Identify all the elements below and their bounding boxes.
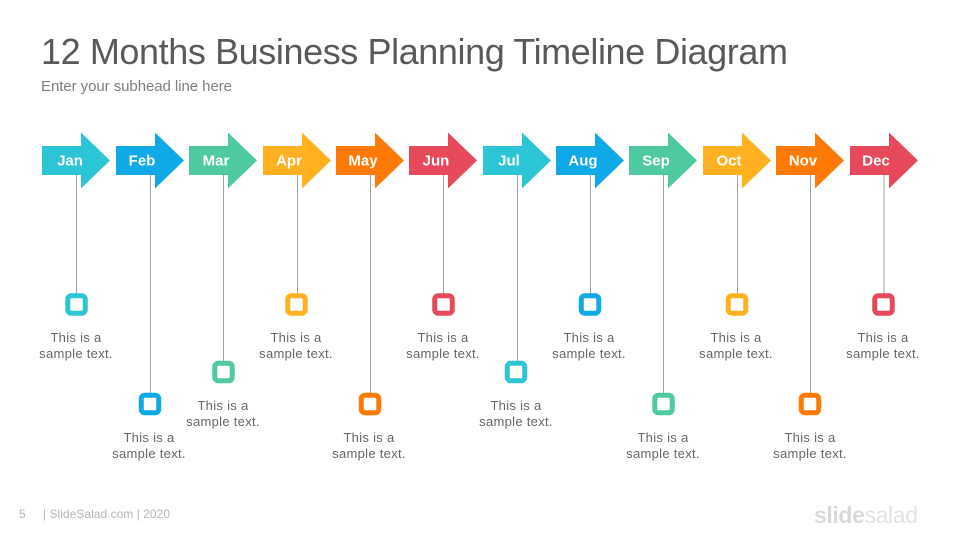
timeline: June: sample text. xyxy=(406,346,480,361)
title: 12 Months Business Planning Timeline Diagram xyxy=(41,31,788,72)
timeline: February: sample text. xyxy=(112,446,186,461)
timeline: March xyxy=(186,132,260,429)
timeline: September: This is a xyxy=(637,430,689,445)
timeline: September: Sep xyxy=(642,152,670,170)
timeline: December: This is a xyxy=(857,330,909,345)
timeline: April: This is a xyxy=(270,330,322,345)
timeline: February: This is a xyxy=(123,430,175,445)
timeline: March: This is a xyxy=(197,398,249,413)
timeline: June xyxy=(406,132,480,361)
timeline: December: Dec xyxy=(862,152,890,170)
timeline: February: Feb xyxy=(129,152,155,170)
timeline: September: sample text. xyxy=(626,446,700,461)
subhead: Enter your subhead line here xyxy=(41,78,232,95)
timeline: August xyxy=(552,132,626,361)
timeline: March: Mar xyxy=(203,152,229,170)
timeline: April xyxy=(259,132,333,361)
timeline: August: This is a xyxy=(563,330,615,345)
timeline: May xyxy=(332,132,406,461)
timeline: November: This is a xyxy=(784,430,836,445)
page number: 5 xyxy=(19,507,26,521)
timeline: March: sample text. xyxy=(186,414,260,429)
timeline: December: sample text. xyxy=(846,346,920,361)
timeline: October: This is a xyxy=(710,330,762,345)
timeline: July: sample text. xyxy=(479,414,553,429)
timeline: August: sample text. xyxy=(552,346,626,361)
timeline: August: Aug xyxy=(568,152,598,170)
timeline: November: Nov xyxy=(789,152,818,170)
timeline: December xyxy=(846,132,920,361)
timeline: July xyxy=(479,132,553,429)
timeline: July: Jul xyxy=(498,152,520,170)
timeline: May: This is a xyxy=(343,430,395,445)
timeline: October: sample text. xyxy=(699,346,773,361)
timeline: January: sample text. xyxy=(39,346,113,361)
timeline: November xyxy=(773,132,847,461)
timeline: February xyxy=(112,132,186,461)
timeline: January: Jan xyxy=(57,152,83,170)
timeline: January: This is a xyxy=(50,330,102,345)
timeline: July: This is a xyxy=(490,398,542,413)
timeline: April: Apr xyxy=(276,152,302,170)
timeline: October: Oct xyxy=(716,152,742,170)
timeline: May: sample text. xyxy=(332,446,406,461)
timeline: April: sample text. xyxy=(259,346,333,361)
timeline: September xyxy=(626,132,700,461)
footer text: | SlideSalad.com | 2020 xyxy=(43,507,170,521)
timeline: June: Jun xyxy=(423,152,449,170)
timeline: May: May xyxy=(348,152,378,170)
timeline: November: sample text. xyxy=(773,446,847,461)
timeline: June: This is a xyxy=(417,330,469,345)
timeline: January xyxy=(39,132,113,361)
logo wordmark: slidesalad xyxy=(814,502,918,528)
timeline: October xyxy=(699,132,773,361)
